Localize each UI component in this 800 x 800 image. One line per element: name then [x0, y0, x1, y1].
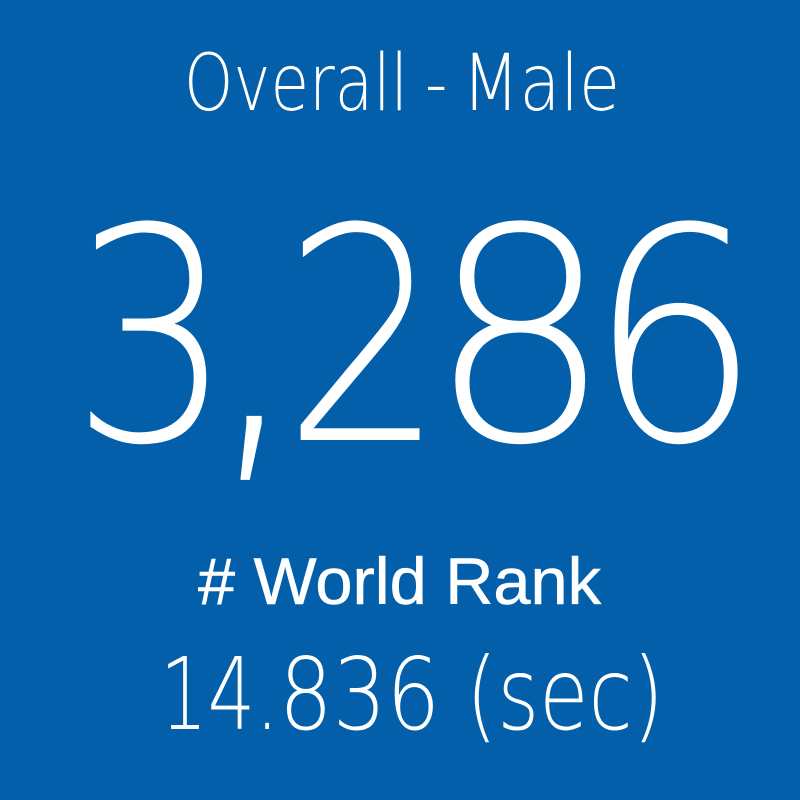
big rank number: ,: [205, 105, 303, 524]
big rank number: 6: [588, 166, 761, 511]
big rank number: 3: [71, 167, 233, 511]
big rank number: 2: [283, 167, 445, 511]
big rank number: [71, 105, 761, 524]
title: Male: [462, 39, 620, 129]
time value: 836: [279, 636, 467, 753]
title: -: [425, 39, 467, 129]
title: Overall: [184, 39, 428, 129]
big rank number: 8: [428, 166, 613, 511]
rank label: # World Rank: [198, 544, 602, 618]
time value: (sec): [466, 636, 664, 753]
time value: 14.: [160, 636, 279, 753]
